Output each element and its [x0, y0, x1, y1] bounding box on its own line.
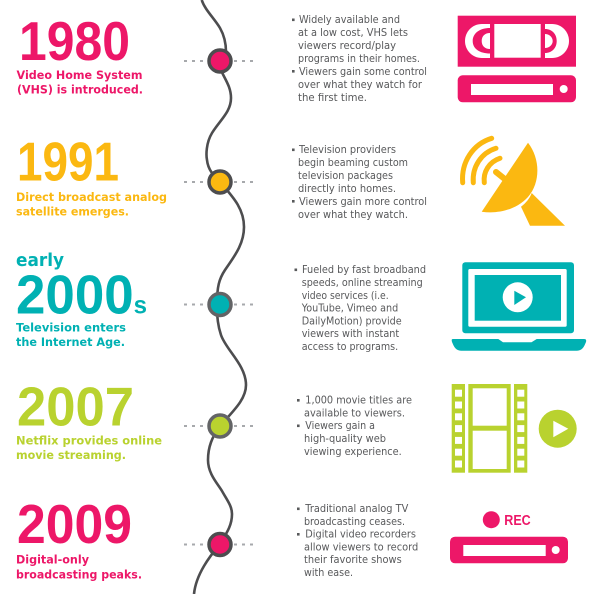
year 2000s: 2000s — [16, 264, 147, 326]
label early: early — [16, 251, 65, 271]
year 2009: 2009 — [17, 493, 132, 555]
bullets 2000s: Fueled by fast broadband — [302, 265, 426, 276]
description 1980: (VHS) is introduced. — [17, 83, 143, 97]
bullets 1980: the first time. — [298, 93, 367, 104]
bullets 2007: Viewers gain a — [305, 421, 375, 432]
description 1980: Video Home System — [16, 68, 142, 82]
bullets 2000s: speeds, online streaming — [302, 278, 423, 289]
panel: 1991 — [16, 131, 565, 226]
bullets 2007: high-quality web — [304, 434, 386, 445]
description 1991: satellite emerges. — [16, 204, 129, 218]
bullets 1991: over what they watch. — [298, 210, 408, 221]
bullets 2000s: video services (i.e. — [302, 291, 389, 302]
timeline curve — [194, 0, 246, 594]
bullets 1980: over what they watch for — [298, 80, 423, 91]
year 2007: 2007 — [17, 376, 134, 438]
year 1991: 1991 — [17, 131, 119, 193]
year 1980: 1980 — [19, 10, 130, 72]
description 2009: broadcasting peaks. — [16, 568, 142, 582]
description 2000s: Television enters — [16, 320, 126, 334]
bullets 2009: broadcasting ceases. — [304, 517, 405, 528]
panel: 2009 — [16, 493, 568, 582]
bullets 2000s: viewers with instant — [302, 329, 399, 340]
description 2009: Digital-only — [16, 553, 89, 567]
bullets 1980 — [292, 15, 427, 104]
icon: VHS tape — [458, 16, 576, 102]
bullets 1991: Television providers — [298, 145, 396, 156]
icon: digital recorder: REC — [504, 513, 531, 529]
bullets 2000s: DailyMotion) provide — [302, 316, 402, 328]
bullets 2007: available to viewers. — [304, 408, 405, 420]
marker 2009 — [209, 534, 231, 556]
panel: 1980 — [16, 10, 576, 104]
marker 1980 — [209, 50, 231, 72]
bullets 1991: television packages — [298, 171, 393, 182]
description 1991: Direct broadcast analog — [16, 190, 167, 204]
description 2007: movie streaming. — [16, 448, 126, 462]
bullets 1991: Viewers gain more control — [299, 197, 427, 208]
bullets 1991: directly into homes. — [298, 184, 396, 195]
bullets 1980: Widely available and — [299, 15, 400, 26]
description 1991 — [16, 190, 167, 218]
bullets 2009: with ease. — [304, 568, 353, 579]
timeline — [184, 0, 256, 594]
bullets 1991: begin beaming custom — [298, 158, 408, 169]
bullets 2007: 1,000 movie titles are — [305, 396, 412, 407]
icon: digital recorder — [450, 511, 568, 563]
description 2000s: the Internet Age. — [16, 335, 125, 349]
bullets 1991 — [292, 145, 427, 221]
bullets 2009: Traditional analog TV — [304, 504, 408, 515]
bullets 2007: viewing experience. — [304, 447, 402, 458]
bullets 2009: allow viewers to record — [304, 542, 418, 554]
bullets 2009: their favorite shows — [304, 555, 402, 566]
description 2007 — [16, 434, 162, 462]
marker 2000s — [209, 294, 231, 316]
bullets 2009: Digital video recorders — [305, 530, 416, 541]
icon: film strip with play button — [452, 384, 577, 473]
marker 2007 — [209, 415, 231, 437]
icon: satellite dish — [463, 138, 565, 226]
panel: 2007 — [16, 376, 577, 473]
bullets 2000s — [294, 265, 426, 353]
description 2007: Netflix provides online — [16, 434, 162, 448]
bullets 1980: at a low cost, VHS lets — [298, 28, 408, 39]
description 1980 — [16, 68, 143, 97]
description 2000s — [16, 320, 126, 349]
bullets 1980: programs in their homes. — [298, 54, 420, 65]
bullets 2000s: YouTube, Vimeo and — [301, 304, 398, 314]
bullets 2000s: access to programs. — [302, 342, 398, 353]
dotted guide lines — [184, 61, 256, 544]
panel: early 2000s — [16, 251, 586, 353]
icon: laptop with play button — [452, 262, 586, 351]
bullets 2009 — [297, 504, 418, 579]
description 2009 — [16, 553, 142, 582]
bullets 2007 — [297, 396, 412, 458]
bullets 1980: viewers record/play — [298, 41, 396, 52]
bullets 1980: Viewers gain some control — [299, 67, 427, 78]
marker 1991 — [209, 171, 231, 193]
